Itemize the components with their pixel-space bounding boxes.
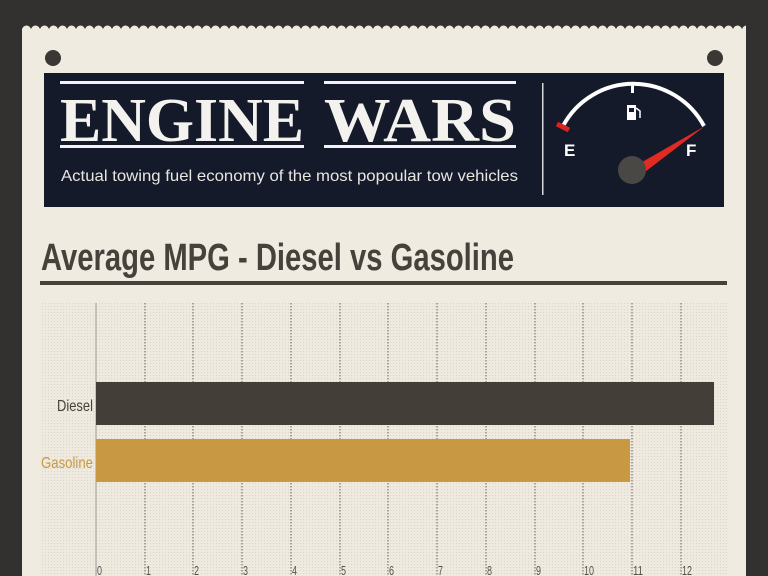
banner title: WARS bbox=[324, 87, 516, 155]
banner title: ENGINE bbox=[60, 87, 304, 155]
icon: fuel gauge bbox=[557, 84, 705, 184]
banner title bbox=[60, 81, 516, 155]
banner subtitle: Actual towing fuel economy of the most popoular tow vehicles bbox=[61, 168, 518, 185]
bar: diesel bbox=[96, 382, 714, 425]
bar: gasoline bbox=[96, 439, 630, 482]
icon: fuel gauge: E bbox=[564, 141, 575, 160]
icon: fuel gauge: F bbox=[686, 141, 696, 160]
title: Average MPG - Diesel vs Gasoline bbox=[41, 237, 514, 279]
bar chart bbox=[40, 303, 727, 576]
x axis labels bbox=[97, 563, 692, 576]
label: gasoline: Gasoline bbox=[41, 455, 93, 472]
banner bbox=[44, 73, 724, 207]
icon: right pin hole bbox=[707, 50, 723, 66]
label: diesel: Diesel bbox=[57, 398, 93, 415]
icon: left pin hole bbox=[45, 50, 61, 66]
